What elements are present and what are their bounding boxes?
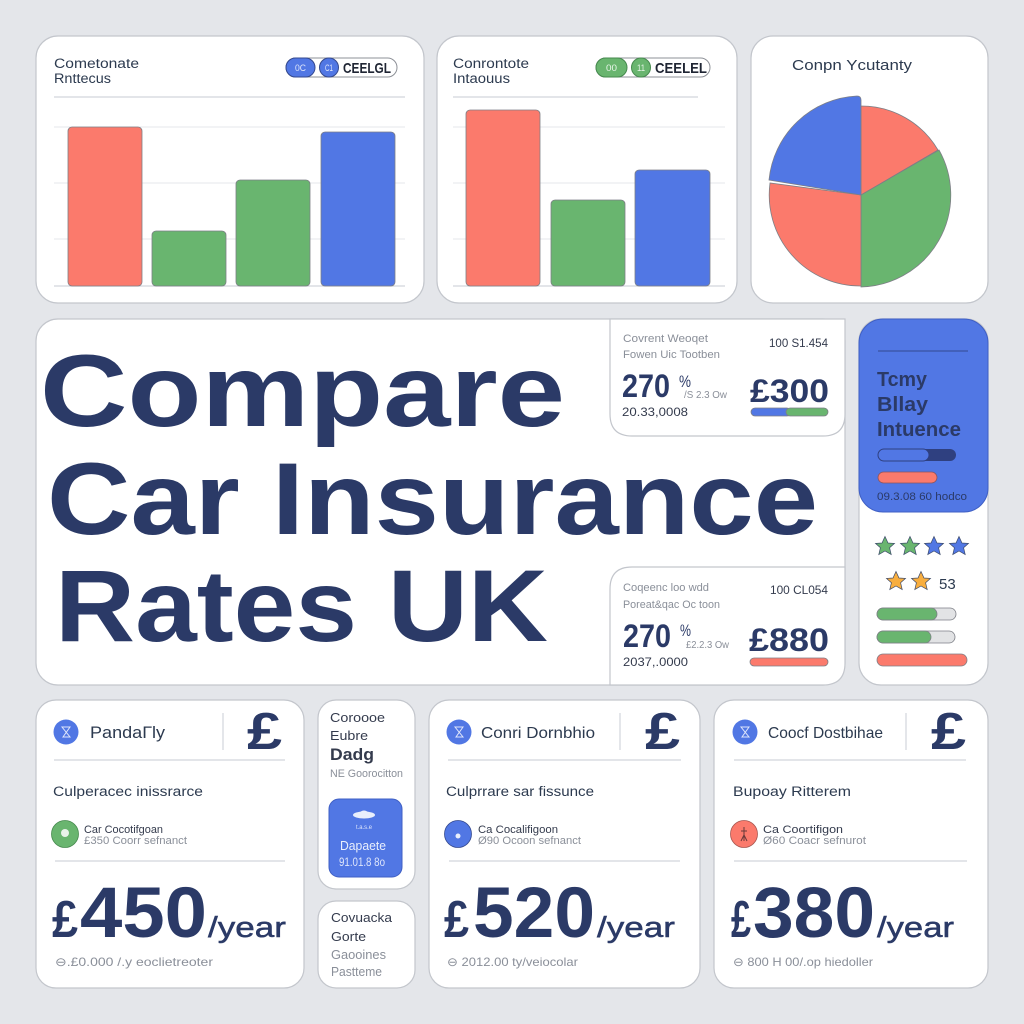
title: Car Insurance — [47, 442, 818, 556]
panel one legend pill: 0C — [295, 63, 306, 73]
panel one legend pill — [286, 58, 397, 77]
red badge and details: Ø60 Coacr sefnurot — [763, 835, 866, 847]
panel two heading — [453, 56, 529, 86]
side card heading — [877, 369, 961, 441]
price unit: /year — [597, 912, 675, 944]
panel: side column — [859, 319, 988, 685]
stat card bottom percent: 270 — [623, 618, 671, 654]
panel two legend pill: CEELEL — [655, 60, 707, 77]
panel: pie chart — [751, 36, 988, 303]
card subheading: Culprrare sar fissunce — [446, 784, 594, 799]
stat card bottom percent: 2037,.0000 — [623, 655, 688, 669]
narrow card text — [330, 710, 403, 780]
list text: Gaooines — [331, 948, 386, 962]
list text: Pastteme — [331, 965, 382, 979]
stat card: bottom — [610, 567, 845, 685]
list text: Gorte — [331, 930, 366, 944]
side card bars — [878, 449, 956, 483]
panel one heading: Rnttecus — [54, 71, 111, 86]
stat card top percent: % — [679, 372, 691, 391]
narrow card blue button — [329, 799, 402, 877]
title — [40, 334, 818, 663]
stat card bottom percent: £2.2.3 Ow — [686, 639, 729, 651]
pie chart — [769, 96, 951, 287]
narrow card blue button: Dapaete — [340, 838, 386, 853]
list text — [331, 911, 392, 979]
stat card top labels — [623, 333, 829, 361]
panel two legend pill: 00 — [606, 63, 617, 73]
side card caption: 09.3.08 60 hodco — [877, 491, 967, 503]
panel: bar chart two — [437, 36, 737, 303]
stat card bottom labels: 100 CL054 — [770, 585, 829, 597]
pie chart heading: Conpn Ycutanty — [792, 57, 913, 74]
stat card top percent: 20.33,0008 — [622, 405, 688, 419]
price: £ — [52, 891, 78, 949]
pound icon: £ — [645, 703, 680, 761]
price unit: /year — [208, 912, 286, 944]
provider card: 520 — [429, 700, 700, 988]
stat card top percent — [622, 368, 727, 419]
price unit: /year — [877, 912, 954, 944]
panel two heading: Intaouus — [453, 71, 510, 86]
provider card: 380 — [714, 700, 988, 988]
stat card top labels: 100 S1.454 — [769, 338, 829, 350]
green badge and details: Car Cocotifgoan — [84, 824, 163, 836]
red badge and details: Ca Coortifigon — [763, 824, 843, 836]
star ratings — [876, 536, 968, 590]
provider card: 450 — [36, 700, 304, 988]
pound icon: £ — [931, 703, 966, 761]
side card heading: Intuence — [877, 419, 961, 441]
blue badge and details: Ca Cocalifigoon — [478, 824, 558, 836]
stat card bottom labels — [623, 582, 829, 611]
price: £ — [444, 891, 469, 949]
panel two legend pill — [596, 58, 710, 77]
narrow card text: Dadg — [330, 746, 374, 764]
provider name: Conri Dornbhio — [481, 725, 595, 742]
title: Compare — [40, 334, 565, 448]
bar chart one bars — [68, 127, 395, 286]
panel two legend pill: 11 — [637, 63, 645, 73]
price: 520 — [473, 874, 595, 953]
narrow card text: Coroooe — [330, 710, 385, 725]
price: £ — [731, 891, 751, 949]
red badge and details — [730, 820, 866, 848]
green badge and details: £350 Coorr sefnanct — [84, 835, 187, 847]
stat card bottom bar — [750, 658, 828, 666]
panel: main title — [36, 319, 845, 685]
stat card bottom labels: Poreat&qac Oc toon — [623, 599, 720, 611]
price: 450 — [80, 874, 207, 953]
stat card: top — [610, 319, 845, 436]
price: 380 — [753, 874, 875, 953]
pound icon: £ — [247, 703, 282, 761]
blue badge and details: Ø90 Ocoon sefnanct — [478, 835, 581, 847]
side card heading: Bllay — [877, 394, 929, 416]
list text: Covuacka — [331, 911, 392, 925]
panel: bar chart one — [36, 36, 424, 303]
panel one heading: Cometonate — [54, 56, 139, 71]
blue badge and details — [444, 820, 581, 848]
provider name: Coocf Dostbihae — [768, 725, 883, 742]
panel one legend pill: CEELGL — [343, 60, 391, 77]
side card heading: Tcmy — [877, 369, 928, 391]
panel two heading: Conrontote — [453, 56, 529, 71]
bar chart two bars — [466, 110, 710, 286]
provider icon — [446, 720, 472, 744]
stat card top percent: /S 2.3 Ow — [684, 389, 727, 401]
rating number: 53 — [939, 576, 956, 593]
provider icon — [54, 720, 78, 744]
narrow card: list — [318, 901, 415, 988]
panel one heading — [54, 56, 139, 86]
title: Rates UK — [55, 549, 548, 663]
stat card bottom percent — [623, 618, 729, 669]
narrow card text: NE Goorocitton — [330, 768, 403, 780]
rating bars — [877, 608, 967, 666]
narrow card: info — [318, 700, 415, 889]
green badge and details — [52, 820, 187, 848]
narrow card blue button: t.a.s.e — [356, 824, 372, 831]
stat card top percent: 270 — [622, 368, 670, 404]
provider name: PandaГly — [90, 724, 166, 742]
side blue card — [859, 319, 988, 512]
stat card bottom percent: % — [680, 621, 691, 640]
card subheading: Bupoay Ritterem — [733, 784, 851, 799]
stat card top labels: Covrent Weoqet — [623, 333, 708, 345]
stat card bottom labels: Coqeenc loo wdd — [623, 582, 709, 594]
stat card top bar — [751, 408, 828, 416]
narrow card text: Eubre — [330, 728, 368, 743]
card subheading: Culperacec inissrarce — [53, 784, 203, 799]
stat card bottom price: £880 — [749, 622, 829, 658]
price note: ⊖ 800 H 00/.op hiedoller — [733, 955, 873, 969]
price note: ⊖.£0.000 /.y eoclietreoter — [55, 955, 213, 969]
stat card top labels: Fowen Uic Tootben — [623, 349, 720, 361]
panel one legend pill: C1 — [325, 63, 333, 73]
stat card top price: £300 — [750, 373, 829, 409]
provider icon — [732, 720, 758, 744]
price note: ⊖ 2012.00 ty/veiocolar — [447, 955, 578, 969]
narrow card blue button: 91.01.8 8o — [339, 857, 385, 869]
